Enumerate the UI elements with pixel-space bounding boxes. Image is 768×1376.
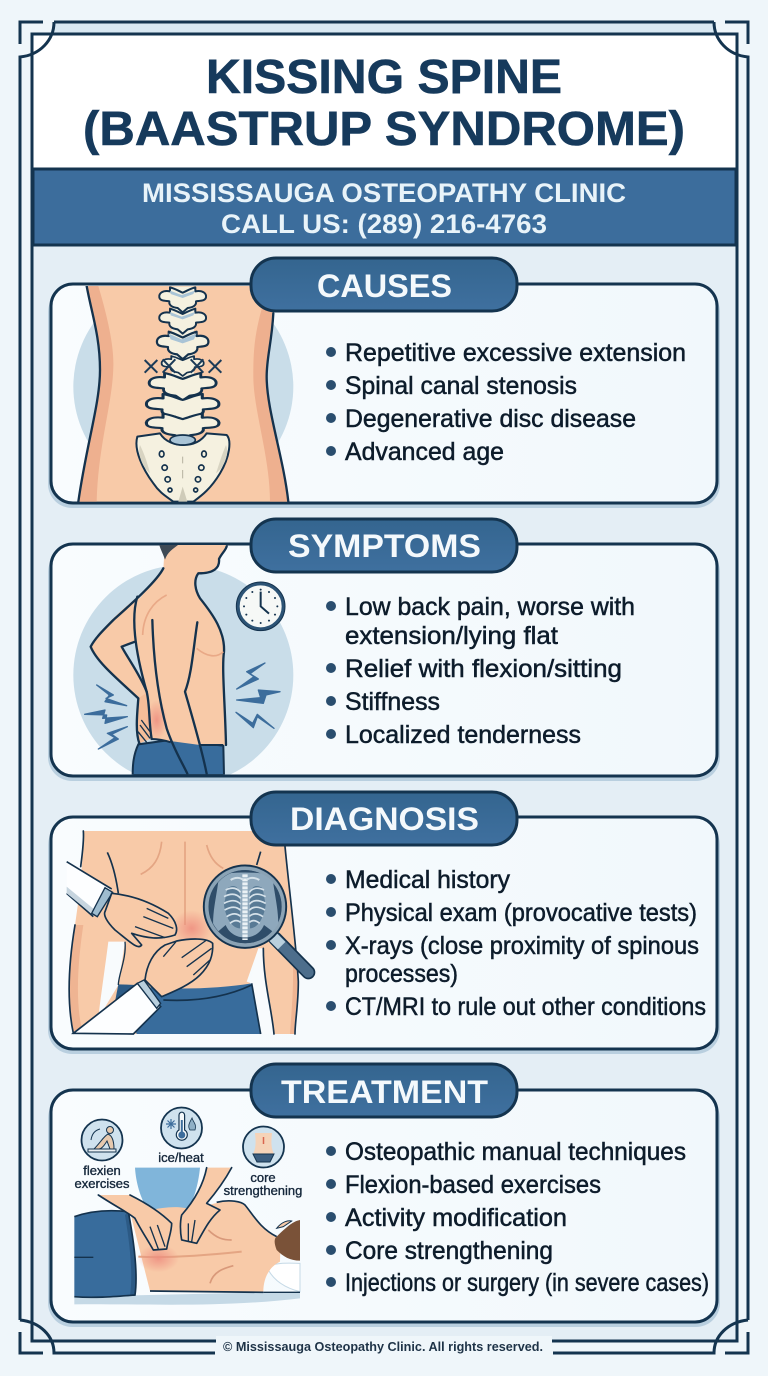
illustration: doctor examining back with magnifier and x-ray bbox=[67, 831, 308, 1034]
heading: causes: CAUSES bbox=[317, 268, 452, 304]
doctor hand lower bbox=[73, 939, 213, 1034]
list: diagnosis: processes) bbox=[345, 960, 458, 988]
clinic banner bbox=[33, 169, 736, 245]
list: diagnosis: CT/MRI to rule out other conditions bbox=[345, 993, 706, 1021]
labels: treatment icons bbox=[75, 1150, 302, 1198]
labels: treatment icons: strengthening bbox=[224, 1183, 302, 1198]
illustration: manual therapy on patient lying face down bbox=[74, 1168, 300, 1305]
list: treatment: Osteopathic manual techniques bbox=[345, 1138, 686, 1166]
panel: symptoms bbox=[48, 544, 720, 785]
list: causes: Degenerative disc disease bbox=[345, 405, 636, 433]
list: causes: Spinal canal stenosis bbox=[345, 372, 577, 400]
list: treatment: Activity modification bbox=[345, 1204, 567, 1232]
list: symptoms: Stiffness bbox=[345, 688, 440, 716]
title: (BAASTRUP SYNDROME) bbox=[83, 103, 685, 156]
list: causes bbox=[326, 339, 686, 466]
labels: treatment icons: ice/heat bbox=[158, 1150, 204, 1165]
list: symptoms: extension/lying flat bbox=[345, 622, 558, 650]
icon: ice and heat bbox=[161, 1108, 202, 1148]
title bbox=[83, 51, 685, 156]
list: diagnosis: X-rays (close proximity of spinous bbox=[345, 932, 699, 960]
list: symptoms bbox=[326, 593, 635, 749]
doctor hand upper bbox=[67, 862, 177, 947]
footer copyright: © Mississauga Osteopathy Clinic. All rights reserved. bbox=[223, 1340, 543, 1354]
list: causes: Repetitive excessive extension bbox=[345, 339, 686, 367]
illustration: lumbar spine with X marks bbox=[73, 277, 293, 502]
list: symptoms: Low back pain, worse with bbox=[345, 593, 635, 621]
panel: causes bbox=[48, 277, 720, 508]
panel: treatment bbox=[48, 1090, 720, 1327]
labels: treatment icons: exercises bbox=[75, 1176, 130, 1191]
list: symptoms: Relief with flexion/sitting bbox=[345, 655, 622, 683]
list: symptoms: Localized tenderness bbox=[345, 721, 581, 749]
list: diagnosis bbox=[326, 866, 706, 1021]
icon: magnifying glass with x-ray bbox=[204, 865, 308, 972]
list: treatment: Flexion-based exercises bbox=[345, 1171, 601, 1199]
list: diagnosis: Medical history bbox=[345, 866, 510, 894]
illustration: man holding lower back bbox=[73, 545, 293, 785]
labels: treatment icons: flexien bbox=[83, 1163, 121, 1178]
heading: symptoms: SYMPTOMS bbox=[288, 528, 481, 564]
list: treatment: Core strengthening bbox=[345, 1237, 553, 1265]
clinic banner: MISSISSAUGA OSTEOPATHY CLINIC bbox=[142, 178, 626, 208]
list: diagnosis: Physical exam (provocative tests) bbox=[345, 899, 697, 927]
icon: pain lightning bolts bbox=[85, 663, 280, 749]
icon: core strengthening bbox=[243, 1126, 284, 1168]
list: causes: Advanced age bbox=[345, 438, 504, 466]
list: treatment: Injections or surgery (in severe cases) bbox=[345, 1269, 709, 1297]
heading: causes bbox=[251, 258, 517, 311]
heading: diagnosis bbox=[251, 792, 517, 845]
heading: diagnosis: DIAGNOSIS bbox=[290, 801, 479, 837]
labels: treatment icons: core bbox=[250, 1170, 276, 1185]
heading: symptoms bbox=[251, 519, 517, 572]
heading: treatment: TREATMENT bbox=[281, 1074, 488, 1110]
list: treatment bbox=[326, 1138, 709, 1297]
title: KISSING SPINE bbox=[206, 51, 562, 104]
icon: flexion exercises bbox=[82, 1120, 122, 1160]
panel: diagnosis bbox=[48, 817, 720, 1054]
icon: clock bbox=[236, 582, 285, 631]
clinic banner: CALL US: (289) 216-4763 bbox=[221, 209, 547, 239]
heading: treatment bbox=[251, 1064, 517, 1117]
